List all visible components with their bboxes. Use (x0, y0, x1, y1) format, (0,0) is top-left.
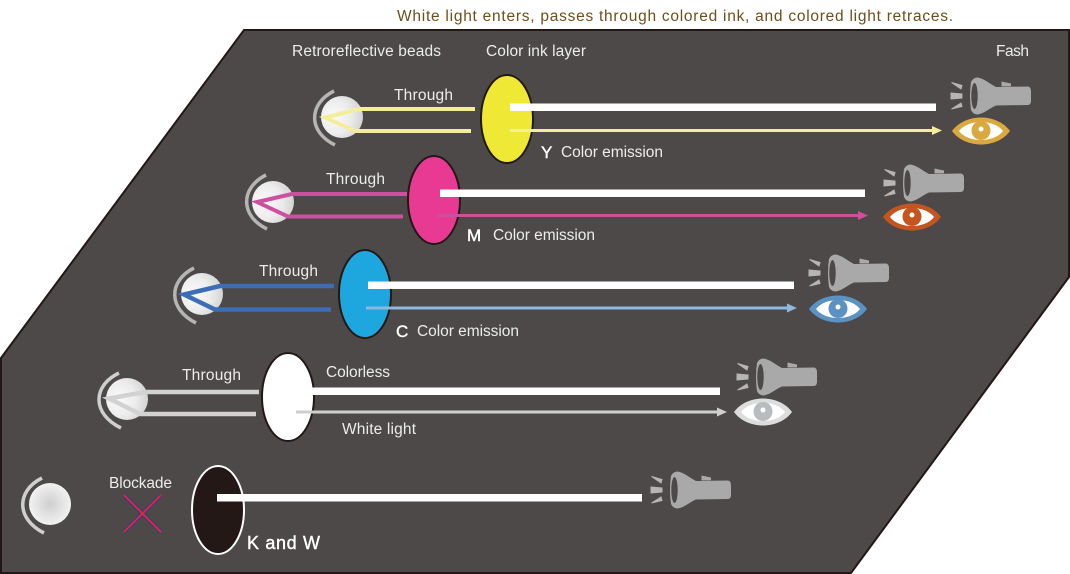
bead (106, 378, 148, 420)
white light label: White light (342, 421, 417, 438)
yellow return arrow (510, 126, 942, 135)
yellow ink ellipse (481, 75, 533, 163)
magenta return arrow (437, 211, 868, 220)
through label: Through (394, 87, 453, 104)
white return arrow (296, 408, 727, 416)
bead arc (315, 91, 335, 145)
white incoming bar (217, 494, 642, 502)
cyan ink ellipse (339, 250, 391, 338)
eye (809, 296, 867, 322)
emission label: Y (541, 143, 552, 162)
label: flash: Fash (996, 43, 1029, 60)
emission text: Color emission (417, 323, 519, 340)
light path through bead (184, 286, 334, 310)
label: color ink layer: Color ink layer (486, 43, 586, 60)
emission label: C (396, 322, 408, 341)
white incoming bar (510, 104, 936, 111)
black ink ellipse (192, 466, 244, 554)
label: retroreflective beads: Retroreflective beads (292, 43, 441, 60)
eye (883, 204, 941, 230)
row: yellow (315, 75, 1031, 163)
light path through bead (109, 392, 259, 414)
flashlight (651, 472, 731, 508)
emission label: M (467, 226, 481, 245)
flashlight (737, 358, 817, 396)
light path through bead (257, 194, 407, 216)
flashlight (809, 254, 889, 292)
clear ink ellipse (262, 353, 314, 441)
title: White light enters, passes through colored ink, and colored light retraces. (397, 8, 953, 25)
bead arc (99, 373, 121, 428)
cyan return arrow (366, 304, 797, 312)
white incoming bar (368, 282, 794, 289)
row: black (23, 466, 731, 554)
bead (321, 96, 363, 138)
white incoming bar (296, 388, 720, 395)
eye (734, 398, 792, 426)
through label: Through (182, 367, 241, 384)
emission text: Color emission (561, 144, 663, 161)
flashlight (951, 78, 1031, 114)
bead (181, 273, 223, 315)
emission text: Color emission (493, 227, 595, 244)
row: white (99, 353, 817, 441)
through label: Through (259, 263, 318, 280)
through label: Through (326, 171, 385, 188)
bead arc (175, 268, 196, 323)
K and W label: K and W (247, 533, 320, 553)
bead (29, 483, 71, 525)
flashlight (884, 164, 964, 202)
eye (952, 118, 1010, 144)
light path through bead (325, 109, 475, 131)
magenta ink ellipse (408, 156, 460, 244)
blocked cross (124, 495, 161, 532)
bead (252, 181, 294, 223)
row: cyan (175, 250, 889, 341)
blockade label: Blockade (109, 475, 172, 492)
bead arc (247, 175, 267, 229)
row: magenta (247, 156, 964, 245)
bead arc (23, 478, 44, 533)
white incoming bar (440, 190, 865, 197)
colorless label: Colorless (326, 364, 390, 381)
